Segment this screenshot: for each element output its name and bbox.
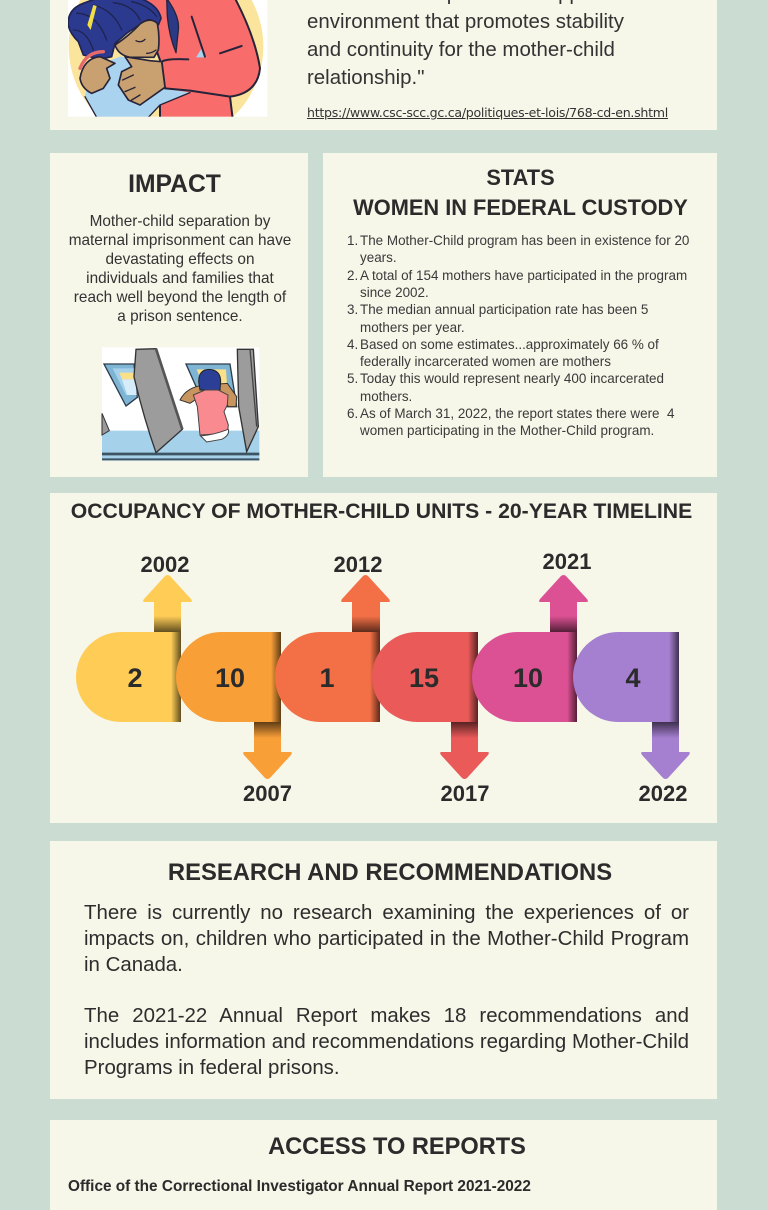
research paragraph: There is currently no research examining the experiences of or [84,901,689,924]
numbered stats list: mothers per year. [360,320,465,334]
heading: access: ACCESS TO REPORTS [268,1134,526,1160]
report title: Office of the Correctional Investigator Annual Report 2021-2022 [68,1178,531,1195]
arrow: 2012 up: 2012 [334,552,382,577]
numbered stats list: As of March 31, 2022, the report states there were 4 [360,406,674,421]
arrow: 2002 up: 2002 [141,552,189,577]
panel: timeline [50,493,717,823]
arrow: 2021 up [539,549,591,632]
panel: program quote [50,0,717,130]
research paragraph: impacts on, children who participated in the Mother-Child Program [84,927,689,950]
arrow: 2017 down: 2017 [441,781,489,806]
heading: timeline: OCCUPANCY OF MOTHER-CHILD UNITS - 20-YEAR TIMELINE [71,500,692,522]
illustration: child at window [102,348,260,461]
impact text [69,213,291,325]
segment: 2017 value 15 [372,632,478,722]
numbered stats list: federally incarcerated women are mothers [360,354,611,369]
heading: research: RESEARCH AND RECOMMENDATIONS [168,859,612,886]
arrow: 2021 up: 2021 [543,549,591,574]
numbered stats list: women participating in the Mother-Child program. [360,423,654,438]
impact text: a prison sentence. [117,308,243,325]
numbered stats list: The median annual participation rate has been 5 [360,302,648,317]
research paragraph [84,901,689,976]
numbered stats list: mothers. [360,389,412,404]
heading: stats [353,165,688,220]
heading: stats: WOMEN IN FEDERAL CUSTODY [353,194,688,220]
impact text: maternal imprisonment can have [69,232,291,249]
numbered stats list: The Mother-Child program has been in existence for 20 [360,233,689,248]
segment: 2002 value 2 [76,632,181,722]
recommendations paragraph [84,1004,689,1079]
heading: stats: STATS [486,165,555,190]
recommendations paragraph: includes information and recommendations regarding Mother-Child [84,1030,689,1053]
numbered stats list: 1. [347,233,358,248]
segment: 2007 value 10 [176,632,281,722]
illustration: mother hugging child [68,0,268,117]
numbered stats list: 3. [347,302,358,317]
arrow: 2007 down: 2007 [243,781,292,806]
arrow: 2022 down: 2022 [639,781,687,806]
segment: 2022 value 4 [573,632,679,722]
impact text: Mother-child separation by [90,213,270,230]
impact text: reach well beyond the length of [74,289,286,306]
segment: 2012 value 1: 1 [319,663,335,693]
numbered stats list [347,233,689,438]
segment: 2022 value 4: 4 [625,663,641,693]
quote text: environment that promotes stability [307,10,624,33]
impact text: devastating effects on [106,251,254,268]
quote text: and continuity for the mother-child [307,38,615,61]
panel: stats [323,153,717,477]
panel: impact [50,153,308,477]
segment: 2007 value 10: 10 [215,663,245,693]
arrow: 2017 down [440,722,489,806]
segment: 2021 value 10 [472,632,577,722]
numbered stats list: 2. [347,268,358,283]
recommendations paragraph: Programs in federal prisons. [84,1056,340,1079]
quote text [307,0,631,89]
impact text: individuals and families that [86,270,274,287]
numbered stats list: Based on some estimates...approximately 66 % of [360,337,659,352]
numbered stats list: 6. [347,406,358,421]
quote text: relationship." [307,66,424,89]
panel: access to reports [50,1120,717,1210]
segment: 2012 value 1 [275,632,380,722]
numbered stats list: Today this would represent nearly 400 incarcerated [360,371,664,386]
heading: impact: IMPACT [128,170,221,198]
segment: 2002 value 2: 2 [127,663,143,693]
arrow: 2007 down [243,722,292,806]
numbered stats list: years. [360,250,397,265]
numbered stats list: since 2002. [360,285,429,300]
research paragraph: in Canada. [84,953,183,976]
arrow: 2012 up [334,552,390,632]
source link: https://www.csc-scc.gc.ca/politiques-et-lois/768-cd-en.shtml [307,105,668,120]
numbered stats list: A total of 154 mothers have participated in the program [360,268,687,283]
numbered stats list: 4. [347,337,358,352]
segment: 2017 value 15: 15 [409,663,439,693]
recommendations paragraph: The 2021-22 Annual Report makes 18 recommendations and [84,1004,689,1027]
arrow: 2022 down [639,722,690,806]
arrow: 2002 up [141,552,192,632]
segment: 2021 value 10: 10 [513,663,543,693]
numbered stats list: 5. [347,371,358,386]
panel: research and recommendations [50,841,717,1099]
